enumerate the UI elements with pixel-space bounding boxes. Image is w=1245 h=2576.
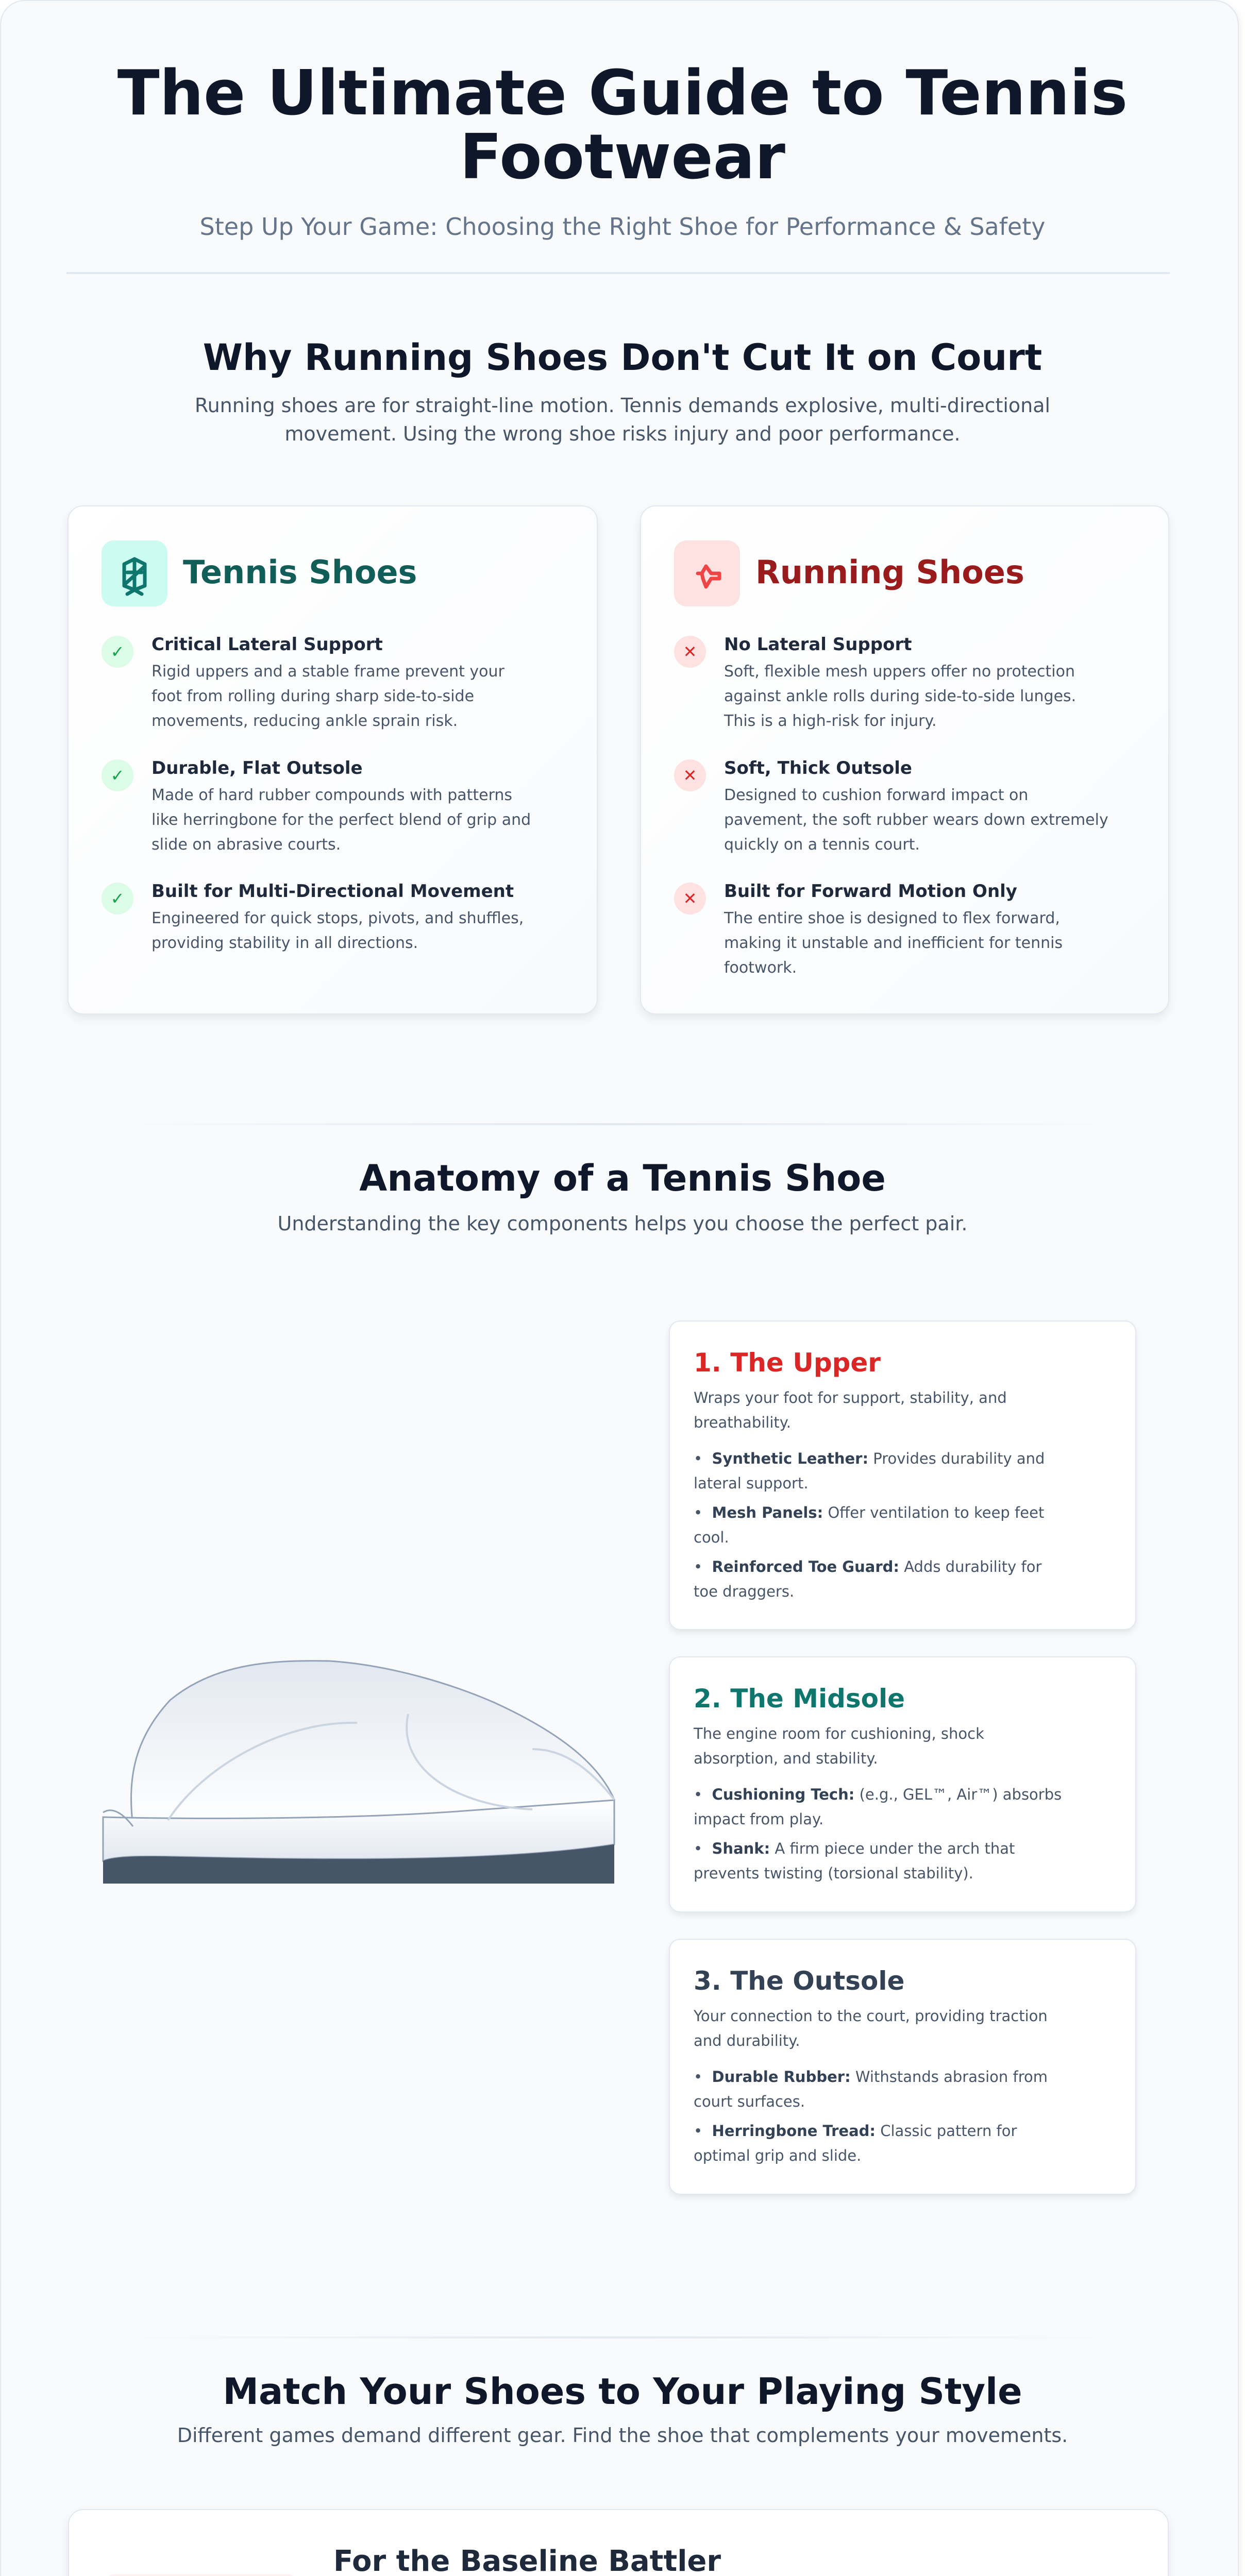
card: the upper: Wraps your foot for support, stability, and	[694, 1389, 1007, 1406]
illustration: shoe	[102, 1660, 615, 1884]
card: the outsole: and durability.	[694, 2032, 800, 2049]
item: lateral support: ✓	[111, 642, 124, 662]
item: no lateral support: ✕	[683, 642, 697, 662]
heading: why running shoes: Why Running Shoes Don't Cut It on Court	[203, 336, 1042, 379]
item: forward motion: making it unstable and inefficient for tennis	[724, 934, 1063, 952]
item: soft outsole: Soft, Thick Outsole	[724, 758, 912, 778]
card: the midsole: • Cushioning Tech: (e.g., GEL™, Air™) absorbs	[694, 1786, 1062, 1803]
item: no lateral support: No Lateral Support	[724, 634, 912, 655]
item: flat outsole: like herringbone for the perfect blend of grip and	[152, 811, 531, 829]
item: no lateral support: Soft, flexible mesh uppers offer no protection	[724, 663, 1075, 681]
title: The Ultimate Guide to Tennis	[117, 58, 1128, 129]
subtitle: Step Up Your Game: Choosing the Right Shoe for Performance & Safety	[200, 213, 1045, 241]
card: the midsole: impact from play.	[694, 1810, 823, 1828]
item: multi-directional: Engineered for quick stops, pivots, and shuffles,	[152, 909, 524, 927]
item: multi-directional: Built for Multi-Directional Movement	[152, 881, 514, 902]
card: the upper: lateral support.	[694, 1475, 809, 1492]
card: baseline battler	[68, 2509, 1169, 2576]
item: forward motion	[674, 881, 1063, 977]
intro text	[195, 394, 1050, 445]
card: the outsole: 3. The Outsole	[694, 1966, 904, 1996]
item: lateral support	[102, 634, 504, 730]
title	[117, 58, 1128, 193]
card: the upper: • Mesh Panels: Offer ventilation to keep feet	[694, 1504, 1044, 1521]
card: the outsole: optimal grip and slide.	[694, 2147, 861, 2164]
card: the outsole: Your connection to the court, providing traction	[694, 2007, 1048, 2025]
item: soft outsole: ✕	[683, 766, 697, 785]
card: the midsole: prevents twisting (torsional stability).	[694, 1865, 973, 1882]
card: the midsole: The engine room for cushioning, shock	[694, 1725, 984, 1742]
card: the upper: breathability.	[694, 1414, 791, 1431]
card: the midsole: absorption, and stability.	[694, 1750, 878, 1767]
item: forward motion: The entire shoe is designed to flex forward,	[724, 909, 1060, 927]
heading: running shoes: Running Shoes	[755, 553, 1024, 591]
card: the midsole: 2. The Midsole	[694, 1684, 905, 1714]
anatomy subtitle: Understanding the key components helps you choose the perfect pair.	[278, 1212, 967, 1235]
playing style subtitle: Different games demand different gear. Find the shoe that complements your movements.	[177, 2424, 1068, 2447]
card: the upper	[669, 1320, 1136, 1630]
intro text: Running shoes are for straight-line motion. Tennis demands explosive, multi-directional	[195, 394, 1050, 417]
icon: tennis shoe	[102, 540, 167, 606]
item: soft outsole: Designed to cushion forward impact on	[724, 786, 1028, 804]
card: the outsole	[669, 1939, 1136, 2195]
heading: anatomy: Anatomy of a Tennis Shoe	[359, 1157, 886, 1199]
item: forward motion: ✕	[683, 889, 697, 908]
item: lateral support: foot from rolling during sharp side-to-side	[152, 687, 474, 705]
item: flat outsole: slide on abrasive courts.	[152, 836, 341, 854]
card: the outsole: court surfaces.	[694, 2093, 805, 2110]
icon: baseline battler	[103, 2574, 300, 2576]
item: lateral support: Critical Lateral Support	[152, 634, 383, 655]
card: the outsole: • Durable Rubber: Withstands abrasion from	[694, 2068, 1048, 2086]
card: the outsole: • Herringbone Tread: Classic pattern for	[694, 2122, 1017, 2140]
heading: tennis shoes: Tennis Shoes	[183, 553, 417, 591]
item: lateral support: Rigid uppers and a stable frame prevent your	[152, 663, 504, 681]
item: flat outsole: Durable, Flat Outsole	[152, 758, 363, 778]
card: the upper: cool.	[694, 1529, 729, 1546]
panel: running shoes	[640, 505, 1169, 1014]
item: multi-directional: providing stability in all directions.	[152, 934, 418, 952]
card: the upper: • Reinforced Toe Guard: Adds durability for	[694, 1558, 1041, 1575]
item: flat outsole	[102, 758, 531, 854]
item: lateral support: movements, reducing ankle sprain risk.	[152, 712, 458, 730]
panel: tennis shoes	[68, 505, 598, 1014]
item: forward motion: footwork.	[724, 959, 797, 977]
card: the upper: 1. The Upper	[694, 1348, 881, 1378]
item: multi-directional: ✓	[111, 889, 124, 908]
item: forward motion: Built for Forward Motion Only	[724, 881, 1017, 902]
card: the upper: toe draggers.	[694, 1583, 794, 1600]
item: flat outsole: Made of hard rubber compounds with patterns	[152, 786, 512, 804]
card: the upper: • Synthetic Leather: Provides durability and	[694, 1450, 1045, 1467]
heading: playing style: Match Your Shoes to Your Playing Style	[223, 2370, 1022, 2413]
item: multi-directional	[102, 881, 524, 952]
intro text: movement. Using the wrong shoe risks injury and poor performance.	[284, 422, 961, 445]
item: no lateral support: This is a high-risk for injury.	[724, 712, 937, 730]
item: no lateral support	[674, 634, 1076, 730]
item: soft outsole: pavement, the soft rubber wears down extremely	[724, 811, 1108, 829]
title: Footwear	[460, 122, 785, 193]
item: soft outsole	[674, 758, 1108, 854]
item: flat outsole: ✓	[111, 766, 124, 785]
card: the midsole: • Shank: A firm piece under the arch that	[694, 1840, 1015, 1857]
item: no lateral support: against ankle rolls during side-to-side lunges.	[724, 687, 1076, 705]
item: soft outsole: quickly on a tennis court.	[724, 836, 920, 854]
icon: running shoe	[674, 540, 740, 606]
card: the midsole	[669, 1656, 1136, 1912]
